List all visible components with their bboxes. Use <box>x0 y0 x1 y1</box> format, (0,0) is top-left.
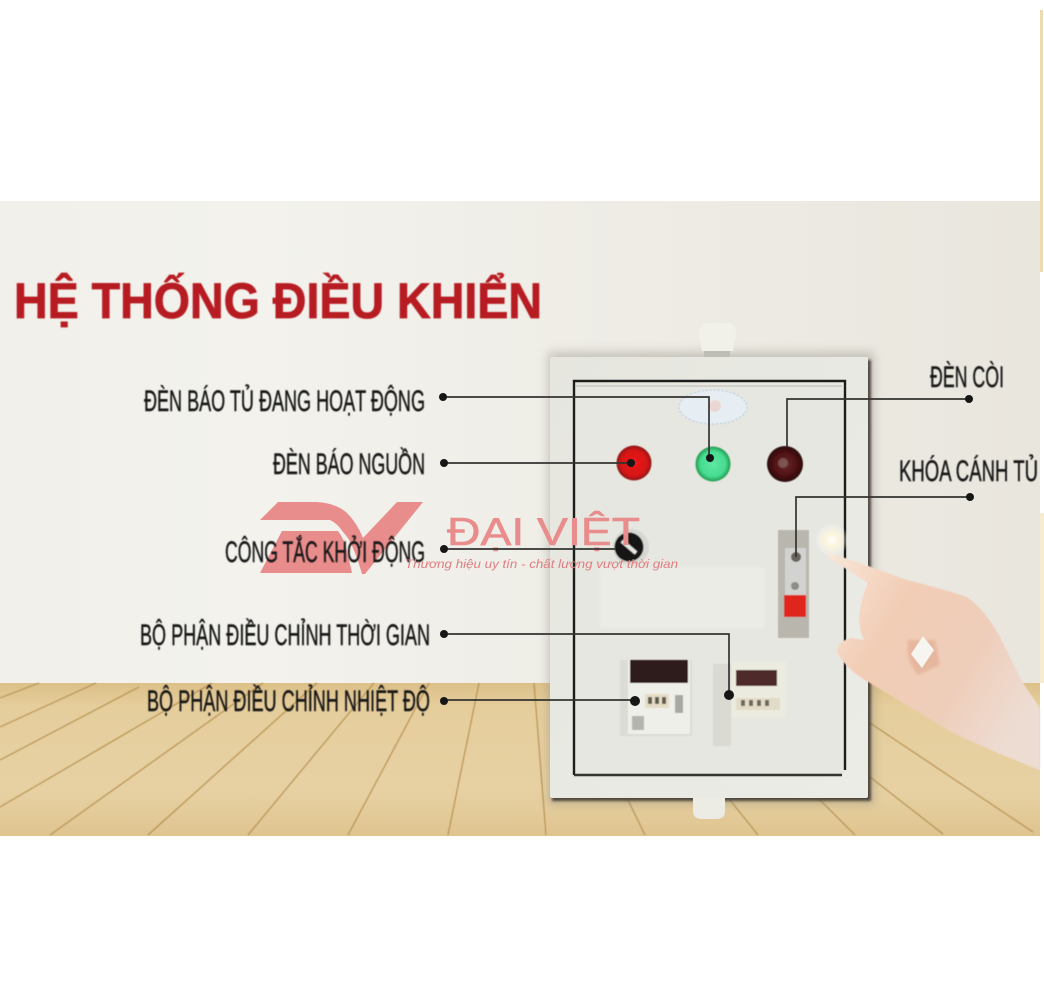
time controller <box>713 662 786 746</box>
green indicator lamp <box>696 446 730 482</box>
cabinet frame <box>550 357 868 798</box>
title: HỆ THỐNG ĐIỀU KHIỂN <box>14 272 542 329</box>
watermark tagline: Thương hiệu uy tín - chất lượng vượt thời gian <box>405 557 678 571</box>
background photo: wooden floor <box>0 683 1040 836</box>
control cabinet <box>548 323 874 819</box>
door lock <box>778 530 809 638</box>
cabinet shadow <box>548 352 874 804</box>
logo mark DV <box>260 502 423 574</box>
background photo: wall <box>0 201 1040 684</box>
fingertip glow <box>815 523 849 557</box>
dark red buzzer lamp <box>767 446 803 482</box>
top cable gland <box>699 323 736 358</box>
label: temperature: BỘ PHẬN ĐIỀU CHỈNH NHIỆT ĐỘ <box>147 684 430 718</box>
logo sticker <box>679 390 747 424</box>
watermark logo <box>260 502 640 574</box>
hand <box>828 553 1040 770</box>
right edge strip <box>1040 10 1044 683</box>
door <box>574 381 845 775</box>
red indicator lamp <box>616 446 652 480</box>
label: timer: BỘ PHẬN ĐIỀU CHỈNH THỜI GIAN <box>140 618 430 652</box>
leader dots <box>439 393 974 706</box>
label: start switch: CÔNG TẮC KHỞI ĐỘNG <box>225 535 425 569</box>
leader lines <box>444 397 970 700</box>
brand name: ĐẠI VIỆT <box>447 511 640 554</box>
label: active indicator: ĐÈN BÁO TỦ ĐANG HOẠT ĐỘNG <box>144 384 425 418</box>
label: power indicator: ĐÈN BÁO NGUỒN <box>273 447 425 481</box>
selector switch <box>613 529 649 565</box>
bottom cable gland <box>693 797 725 819</box>
callout labels and leader lines <box>140 361 1038 718</box>
temperature controller <box>620 660 692 736</box>
